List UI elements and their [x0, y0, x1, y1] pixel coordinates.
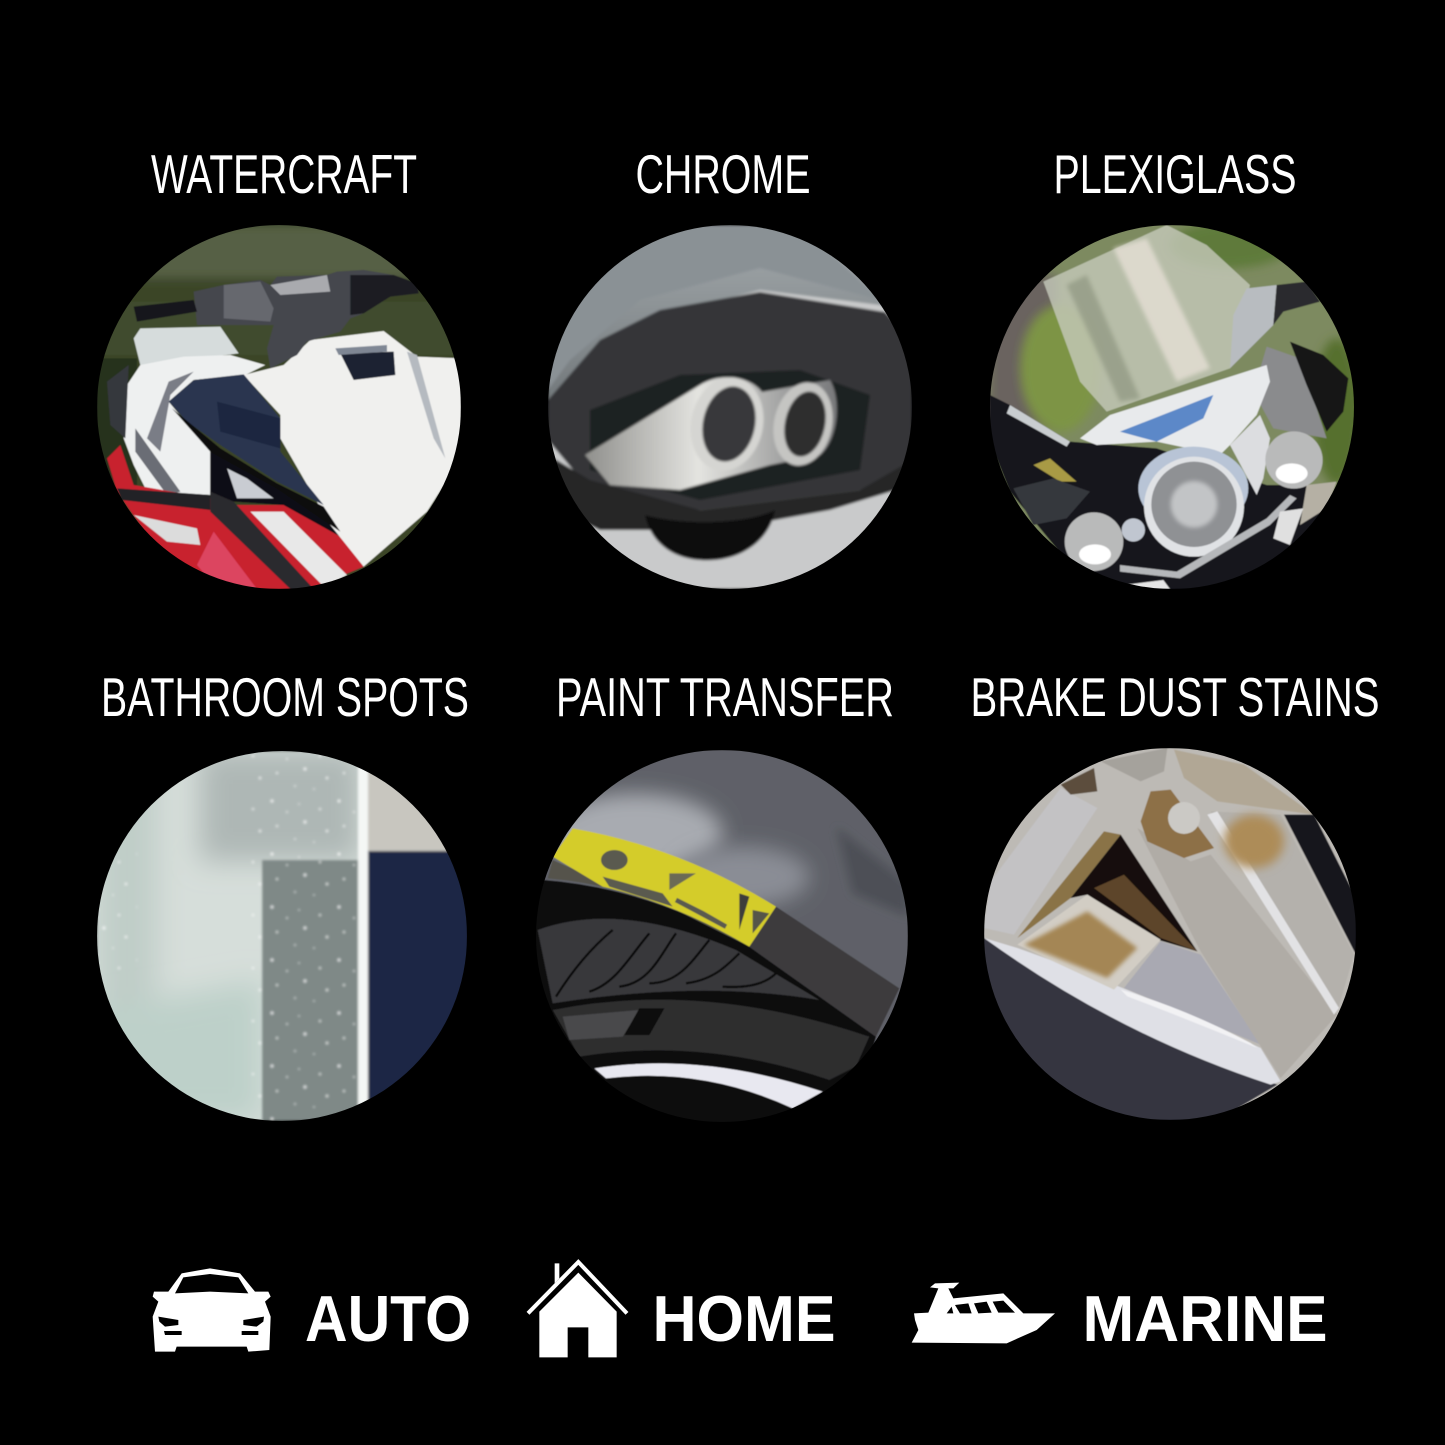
icon: car [153, 1268, 271, 1352]
heading: chrome: CHROME [636, 143, 810, 205]
photo: bathroom spots [97, 751, 468, 1121]
category: home [528, 1262, 836, 1357]
photo: chrome [548, 225, 912, 589]
label: marine: MARINE [1082, 1282, 1328, 1355]
label: auto: AUTO [305, 1282, 471, 1355]
category: marine [912, 1282, 1328, 1355]
icon: house [528, 1262, 627, 1357]
icon: boat [912, 1283, 1055, 1343]
heading: watercraft: WATERCRAFT [151, 143, 417, 205]
photo: watercraft [97, 225, 461, 589]
photo: brake dust stains [984, 748, 1356, 1120]
heading: plexiglass: PLEXIGLASS [1054, 143, 1296, 205]
label: home: HOME [652, 1282, 836, 1355]
photo: plexiglass [990, 222, 1360, 589]
category: auto [153, 1268, 471, 1355]
heading: bathroom spots: BATHROOM SPOTS [101, 666, 469, 728]
photo: paint transfer [536, 750, 908, 1122]
heading: paint transfer: PAINT TRANSFER [556, 666, 894, 728]
